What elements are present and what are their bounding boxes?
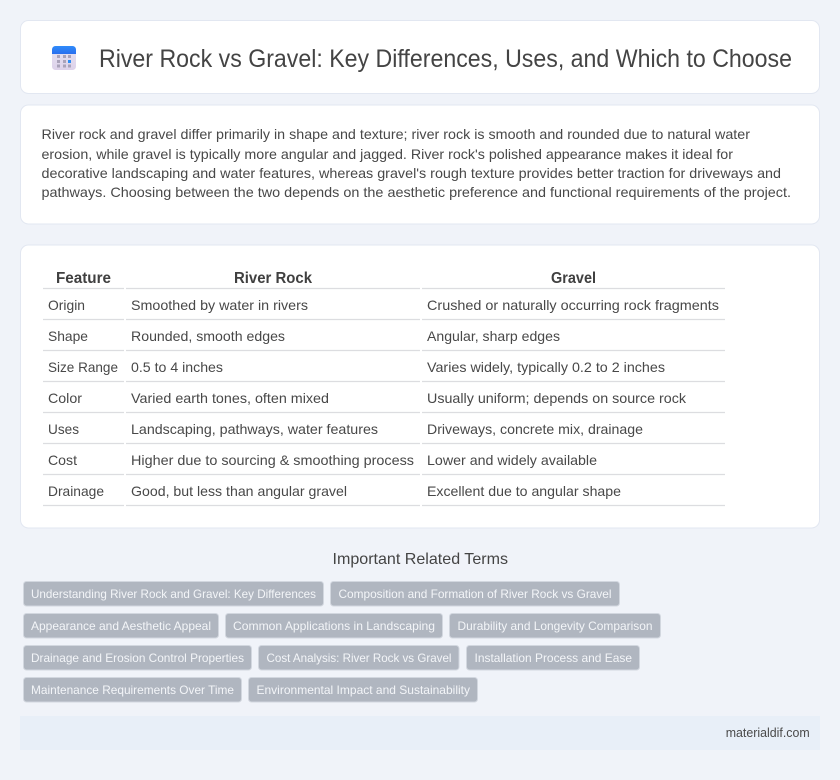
row: drainage: Excellent due to angular shape	[427, 483, 621, 499]
row: size range: 0.5 to 4 inches	[131, 359, 223, 375]
row: color: Color	[48, 390, 82, 406]
row: origin: Origin	[48, 297, 85, 313]
chip: Environmental Impact and Sustainability	[256, 683, 470, 697]
table header row	[56, 270, 596, 287]
text block: introduction paragraph	[42, 126, 791, 200]
row: origin: Smoothed by water in rivers	[131, 297, 308, 313]
row: uses: Uses	[48, 421, 79, 437]
text block: introduction paragraph: erosion, while gravel is typically more angular and jagged. River rock's polished appearance makes it ideal for	[42, 146, 733, 162]
row: shape: Rounded, smooth edges	[131, 328, 285, 344]
row: size range: Varies widely, typically 0.2 to 2 inches	[427, 359, 665, 375]
chip: Installation Process and Ease	[474, 651, 632, 665]
chip: Understanding River Rock and Gravel: Key Differences	[31, 587, 316, 601]
chip: Durability and Longevity Comparison	[458, 619, 652, 633]
footer: materialdif.com	[726, 726, 810, 740]
row: cost	[48, 452, 597, 468]
text block: introduction paragraph: River rock and gravel differ primarily in shape and texture; river rock is smooth and rounded due to natural water	[42, 126, 750, 142]
chip	[24, 582, 324, 606]
row: cost: Higher due to sourcing & smoothing process	[131, 452, 414, 468]
chip: Cost Analysis: River Rock vs Gravel	[266, 651, 452, 665]
row: color: Usually uniform; depends on source rock	[427, 390, 687, 406]
row: size range: Size Range	[48, 359, 118, 375]
table header row: Gravel	[551, 270, 596, 287]
title: River Rock vs Gravel: Key Differences, Uses, and Which to Choose	[99, 45, 792, 73]
chip	[226, 614, 442, 638]
chip: Maintenance Requirements Over Time	[31, 683, 234, 697]
chip	[330, 582, 620, 606]
chip	[24, 646, 252, 670]
panel: comparison table	[20, 245, 820, 528]
chip: Common Applications in Landscaping	[233, 619, 435, 633]
row: color: Varied earth tones, often mixed	[131, 390, 329, 406]
row: uses	[48, 421, 643, 437]
chip	[258, 646, 459, 670]
chip	[24, 614, 218, 638]
chip	[466, 646, 640, 670]
table header row: River Rock	[234, 270, 312, 287]
row: cost: Lower and widely available	[427, 452, 597, 468]
panel: introduction	[20, 105, 820, 224]
row: size range	[48, 359, 665, 375]
chip: Appearance and Aesthetic Appeal	[31, 619, 211, 633]
row: shape	[48, 328, 560, 344]
chip: Composition and Formation of River Rock vs Gravel	[338, 587, 612, 601]
chip: Drainage and Erosion Control Properties	[31, 651, 244, 665]
row: cost: Cost	[48, 452, 77, 468]
heading: important related terms: Important Related Terms	[332, 551, 508, 568]
chip	[248, 678, 478, 702]
row: shape: Shape	[48, 328, 88, 344]
row: color	[48, 390, 687, 406]
row: drainage	[48, 483, 621, 499]
panel: title header	[20, 20, 820, 94]
row: origin: Crushed or naturally occurring rock fragments	[427, 297, 719, 313]
row: drainage: Drainage	[48, 483, 104, 499]
chip	[450, 614, 660, 638]
chip	[24, 678, 242, 702]
row: origin	[48, 297, 719, 313]
text block: introduction paragraph: pathways. Choosing between the two depends on the aesthetic preference and functional requirements of the project.	[42, 184, 791, 200]
row: uses: Driveways, concrete mix, drainage	[427, 421, 643, 437]
row: drainage: Good, but less than angular gravel	[131, 483, 347, 499]
panel: related term chips	[24, 582, 660, 702]
footer	[20, 716, 820, 750]
icon: calendar	[52, 46, 76, 70]
row: shape: Angular, sharp edges	[427, 328, 560, 344]
text block: introduction paragraph: decorative landscaping and water features, whereas gravel's rough texture provides better traction for driveways and	[42, 165, 781, 181]
table header row: Feature	[56, 270, 111, 287]
row: uses: Landscaping, pathways, water features	[131, 421, 378, 437]
